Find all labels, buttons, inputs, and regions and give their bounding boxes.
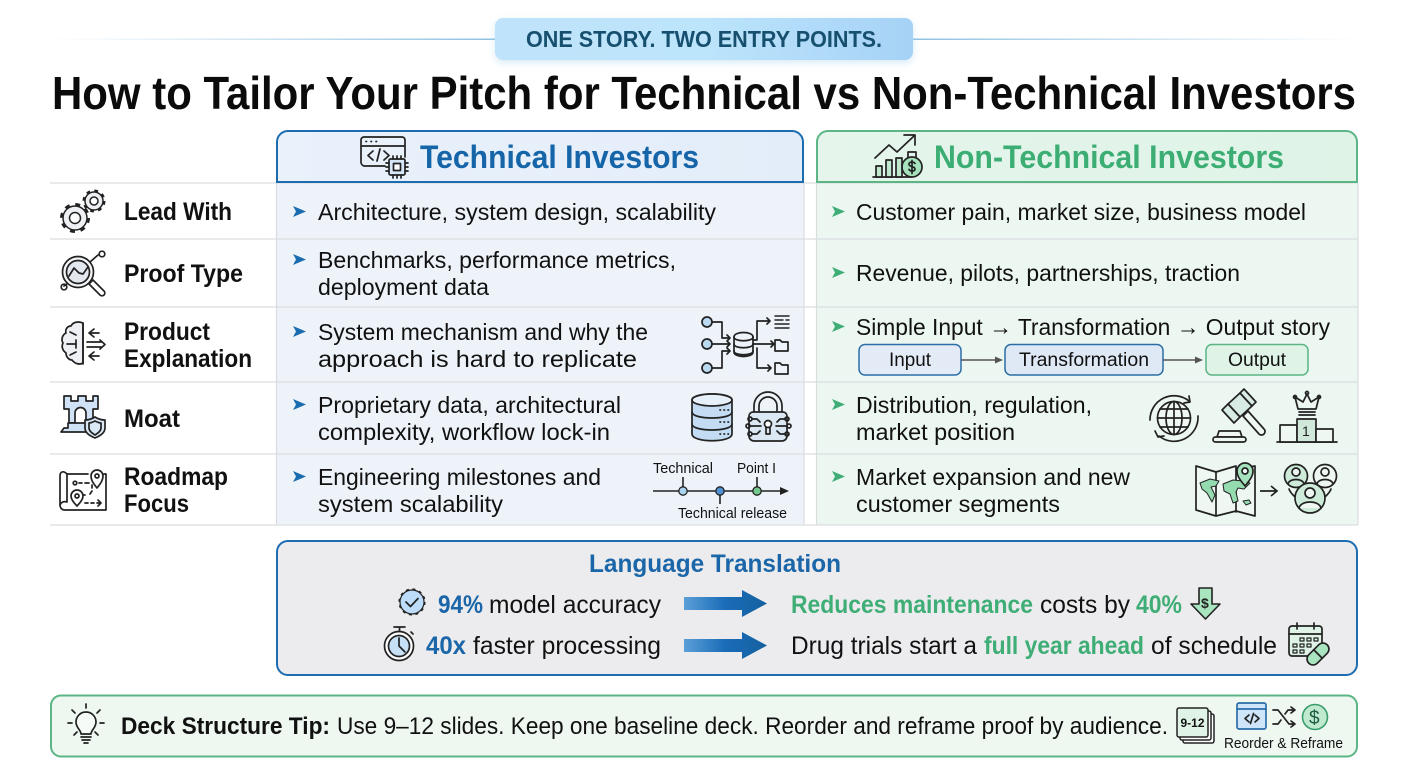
icon: stopwatch (384, 627, 414, 660)
arrow: accuracy to maintenance (684, 590, 767, 617)
panel: deck structure tip (51, 696, 1357, 756)
chart: technical timeline: Technical release (678, 506, 787, 522)
icon: slide stack: 9-12 (1180, 718, 1204, 730)
technical: proof type (293, 247, 676, 300)
icon: magnifier with chart (61, 251, 105, 296)
outcome text: of schedule: of schedule (1151, 632, 1277, 660)
row: proof type label (61, 251, 243, 296)
tagline pill (495, 18, 913, 60)
icon: down arrow with dollar (1191, 588, 1220, 619)
technical: product explanation (293, 319, 648, 372)
outcome: full year ahead: full year ahead (984, 632, 1144, 660)
row: roadmap focus label: Roadmap (124, 463, 228, 491)
arrow: speed to schedule (684, 632, 767, 659)
arrow: map to customers (1260, 486, 1277, 496)
technical: proof type: Benchmarks, performance metrics, (318, 247, 676, 273)
icon: code window with chip (361, 137, 408, 178)
tip body: Use 9–12 slides. Keep one baseline deck. Reorder and reframe proof by audience. (337, 713, 1168, 740)
row: product explanation label: Product (124, 318, 211, 346)
technical: product explanation: System mechanism and why the (318, 319, 648, 345)
icon: circuit padlock (746, 392, 791, 441)
non-technical: moat (832, 392, 1092, 445)
row: lead with label: Lead With (124, 198, 232, 226)
flow diagram: input to output (859, 344, 1308, 375)
non-technical: roadmap focus: customer segments (856, 491, 1060, 517)
row: roadmap focus label: Focus (124, 490, 189, 518)
row: moat label (61, 396, 181, 438)
row: product explanation label: Explanation (124, 345, 252, 373)
icon: route map (60, 470, 106, 510)
technical: product explanation: approach is hard to replicate (318, 346, 637, 372)
technical: roadmap focus: system scalability (318, 491, 503, 517)
icon: gears (62, 192, 104, 230)
icon: gavel (1213, 389, 1265, 442)
row: proof type label: Proof Type (124, 260, 243, 288)
icon: dollar coin: $ (1309, 708, 1320, 729)
row: product explanation label (62, 318, 252, 373)
icon: customer segments (1284, 464, 1336, 513)
icon: slide stack (1177, 708, 1214, 743)
non-technical: moat: Distribution, regulation, (856, 392, 1092, 418)
top decorative rule right (913, 38, 1358, 40)
non-technical: proof type: Revenue, pilots, partnerships, traction (856, 260, 1240, 286)
icon: calendar with pill (1289, 623, 1331, 667)
metric: faster processing value: 40x (426, 632, 466, 660)
header: technical investors (277, 131, 803, 182)
icon: podium with crown: 1 (1302, 423, 1310, 439)
chart: technical timeline (653, 461, 789, 522)
technical: moat: Proprietary data, architectural (318, 392, 621, 418)
non-technical: roadmap focus: Market expansion and new (856, 464, 1131, 490)
chart: technical timeline: Point I (737, 461, 776, 477)
icon: dollar coin (1302, 704, 1328, 730)
non-technical: roadmap focus (832, 464, 1131, 517)
flow diagram: input to output: Output (1228, 350, 1287, 371)
flow diagram: input to output: Transformation (1019, 350, 1149, 371)
technical: proof type: deployment data (318, 274, 490, 300)
flow diagram: input to output: Input (889, 350, 932, 371)
non-technical: product explanation: Simple Input → Transformation → Output story (856, 314, 1330, 340)
outcome text: costs by: costs by (1040, 591, 1130, 619)
outcome: drug trials: Drug trials start a (791, 632, 977, 660)
row: moat label: Moat (124, 405, 181, 433)
non-technical: moat: market position (856, 419, 1015, 445)
row: lead with label (62, 192, 232, 230)
panel: language translation (277, 541, 1357, 675)
tip heading: Deck Structure Tip: (121, 713, 330, 740)
non-technical: lead with: Customer pain, market size, business model (856, 199, 1306, 225)
icon: castle with shield (61, 396, 105, 438)
row rules (50, 183, 1358, 525)
icon: brain with arrows (62, 322, 105, 364)
outcome: reduces maintenance: Reduces maintenance (791, 591, 1033, 619)
outcome value: forty percent: 40% (1136, 591, 1182, 619)
row: roadmap focus label (60, 463, 228, 518)
icon: world map with pin (1196, 463, 1255, 516)
heading: language translation: Language Translation (589, 550, 841, 578)
metric text: faster processing: faster processing (473, 632, 661, 660)
icon: database (692, 394, 732, 441)
icon: growth chart with money bag (873, 135, 922, 177)
icon: code window (1237, 703, 1266, 729)
technical: moat: complexity, workflow lock-in (318, 419, 610, 445)
technical: roadmap focus (293, 464, 601, 517)
tagline pill: ONE STORY. TWO ENTRY POINTS. (526, 26, 882, 52)
icon: podium with crown (1277, 392, 1337, 442)
chart: technical timeline: Technical (653, 461, 713, 477)
icon: verified badge (400, 590, 424, 614)
technical: moat (293, 392, 621, 445)
header: non-technical investors: Non-Technical Investors (934, 139, 1284, 175)
icon: lightbulb (68, 704, 104, 743)
header: technical investors: Technical Investors (420, 139, 699, 175)
metric: model accuracy value: 94% (438, 591, 483, 619)
metric text: model accuracy: model accuracy (489, 591, 661, 619)
icon: down arrow with dollar: $ (1201, 595, 1209, 611)
top decorative rule left (50, 38, 495, 40)
icon: globe with cycle arrows (1150, 396, 1198, 441)
technical: roadmap focus: Engineering milestones and (318, 464, 601, 490)
panel: non-technical column background (817, 183, 1358, 525)
caption: reorder and reframe: Reorder & Reframe (1224, 736, 1343, 752)
header: non-technical investors (817, 131, 1357, 182)
icon: shuffle arrows (1273, 707, 1295, 727)
icon: data pipeline (702, 316, 789, 374)
panel: technical column background (277, 183, 804, 525)
technical: lead with: Architecture, system design, scalability (318, 199, 716, 225)
